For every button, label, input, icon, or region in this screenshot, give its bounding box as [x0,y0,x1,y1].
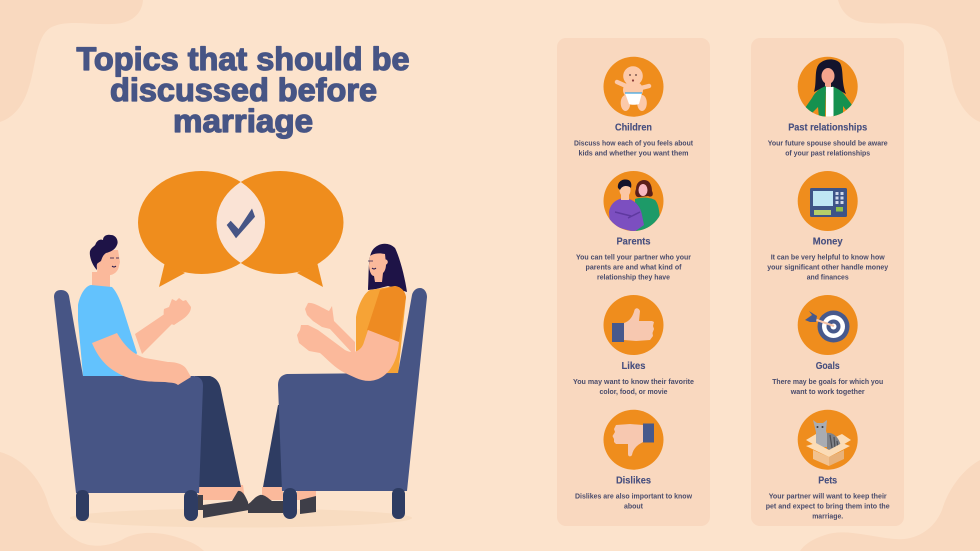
icon: thumbs up [604,295,664,355]
title: Topics that should be [76,41,410,77]
text: Goals description [772,377,884,396]
armchair [54,290,203,493]
text: Past relationships description [768,138,888,158]
text: Money description [767,252,889,282]
text: Pets description: marriage. [812,512,843,520]
text: Children description: Discuss how each of you feels about [574,138,693,148]
illustration: speech bubbles with check mark [138,171,344,287]
text: Parents description: parents are and what kind of [586,262,682,272]
text: Parents description: You can tell your partner who your [576,252,691,262]
text: Goals description: There may be goals for which you [772,377,884,386]
text: Parents description: relationship they have [597,272,670,282]
text: Money description: and finances [807,272,849,282]
ground shadow [70,508,412,528]
panel: left column [557,38,710,526]
title: marriage [173,103,313,139]
panel: right column [751,38,904,526]
icon: thumbs down [604,410,664,470]
text: Likes description [573,377,694,396]
icon: woman [798,57,858,119]
text: Past relationships description: Your future spouse should be aware [768,138,888,148]
text: Pets description: pet and expect to bring them into the [766,502,890,510]
illustration: man in armchair [54,235,249,521]
icon: baby [604,57,664,117]
text: Pets description [766,492,890,520]
text: Goals description: want to work together [790,387,865,396]
text: Pets description: Your partner will want to keep their [769,492,887,500]
text: Dislikes description [575,492,692,510]
text: Past relationships description: of your past relationships [785,148,870,158]
heading: Likes: Likes [622,361,646,372]
armchair [278,288,427,491]
icon: ATM [798,171,858,231]
text: Likes description: You may want to know their favorite [573,377,694,386]
heading: Goals: Goals [816,361,840,372]
heading: Past relationships: Past relationships [788,122,868,134]
heading: Parents: Parents [616,236,651,248]
heading: Children: Children [615,122,652,134]
text: Money description: your significant other handle money [767,262,889,272]
illustration: woman in armchair [248,244,427,519]
text: Money description: It can be very helpful to know how [771,252,885,262]
icon: cat in a box [798,410,858,470]
icon: target with arrow [798,295,858,355]
text: Dislikes description: about [624,502,643,510]
title [76,41,410,139]
icon: couple [604,171,664,235]
heading: Pets: Pets [818,476,838,486]
heading: Dislikes: Dislikes [616,476,651,486]
heading: Money: Money [813,236,843,248]
text: Children description: kids and whether you want them [578,148,689,158]
text: Children description [574,138,693,158]
text: Dislikes description: Dislikes are also important to know [575,492,692,500]
title: discussed before [110,72,377,108]
text: Parents description [576,252,691,282]
text: Likes description: color, food, or movie [600,387,668,396]
